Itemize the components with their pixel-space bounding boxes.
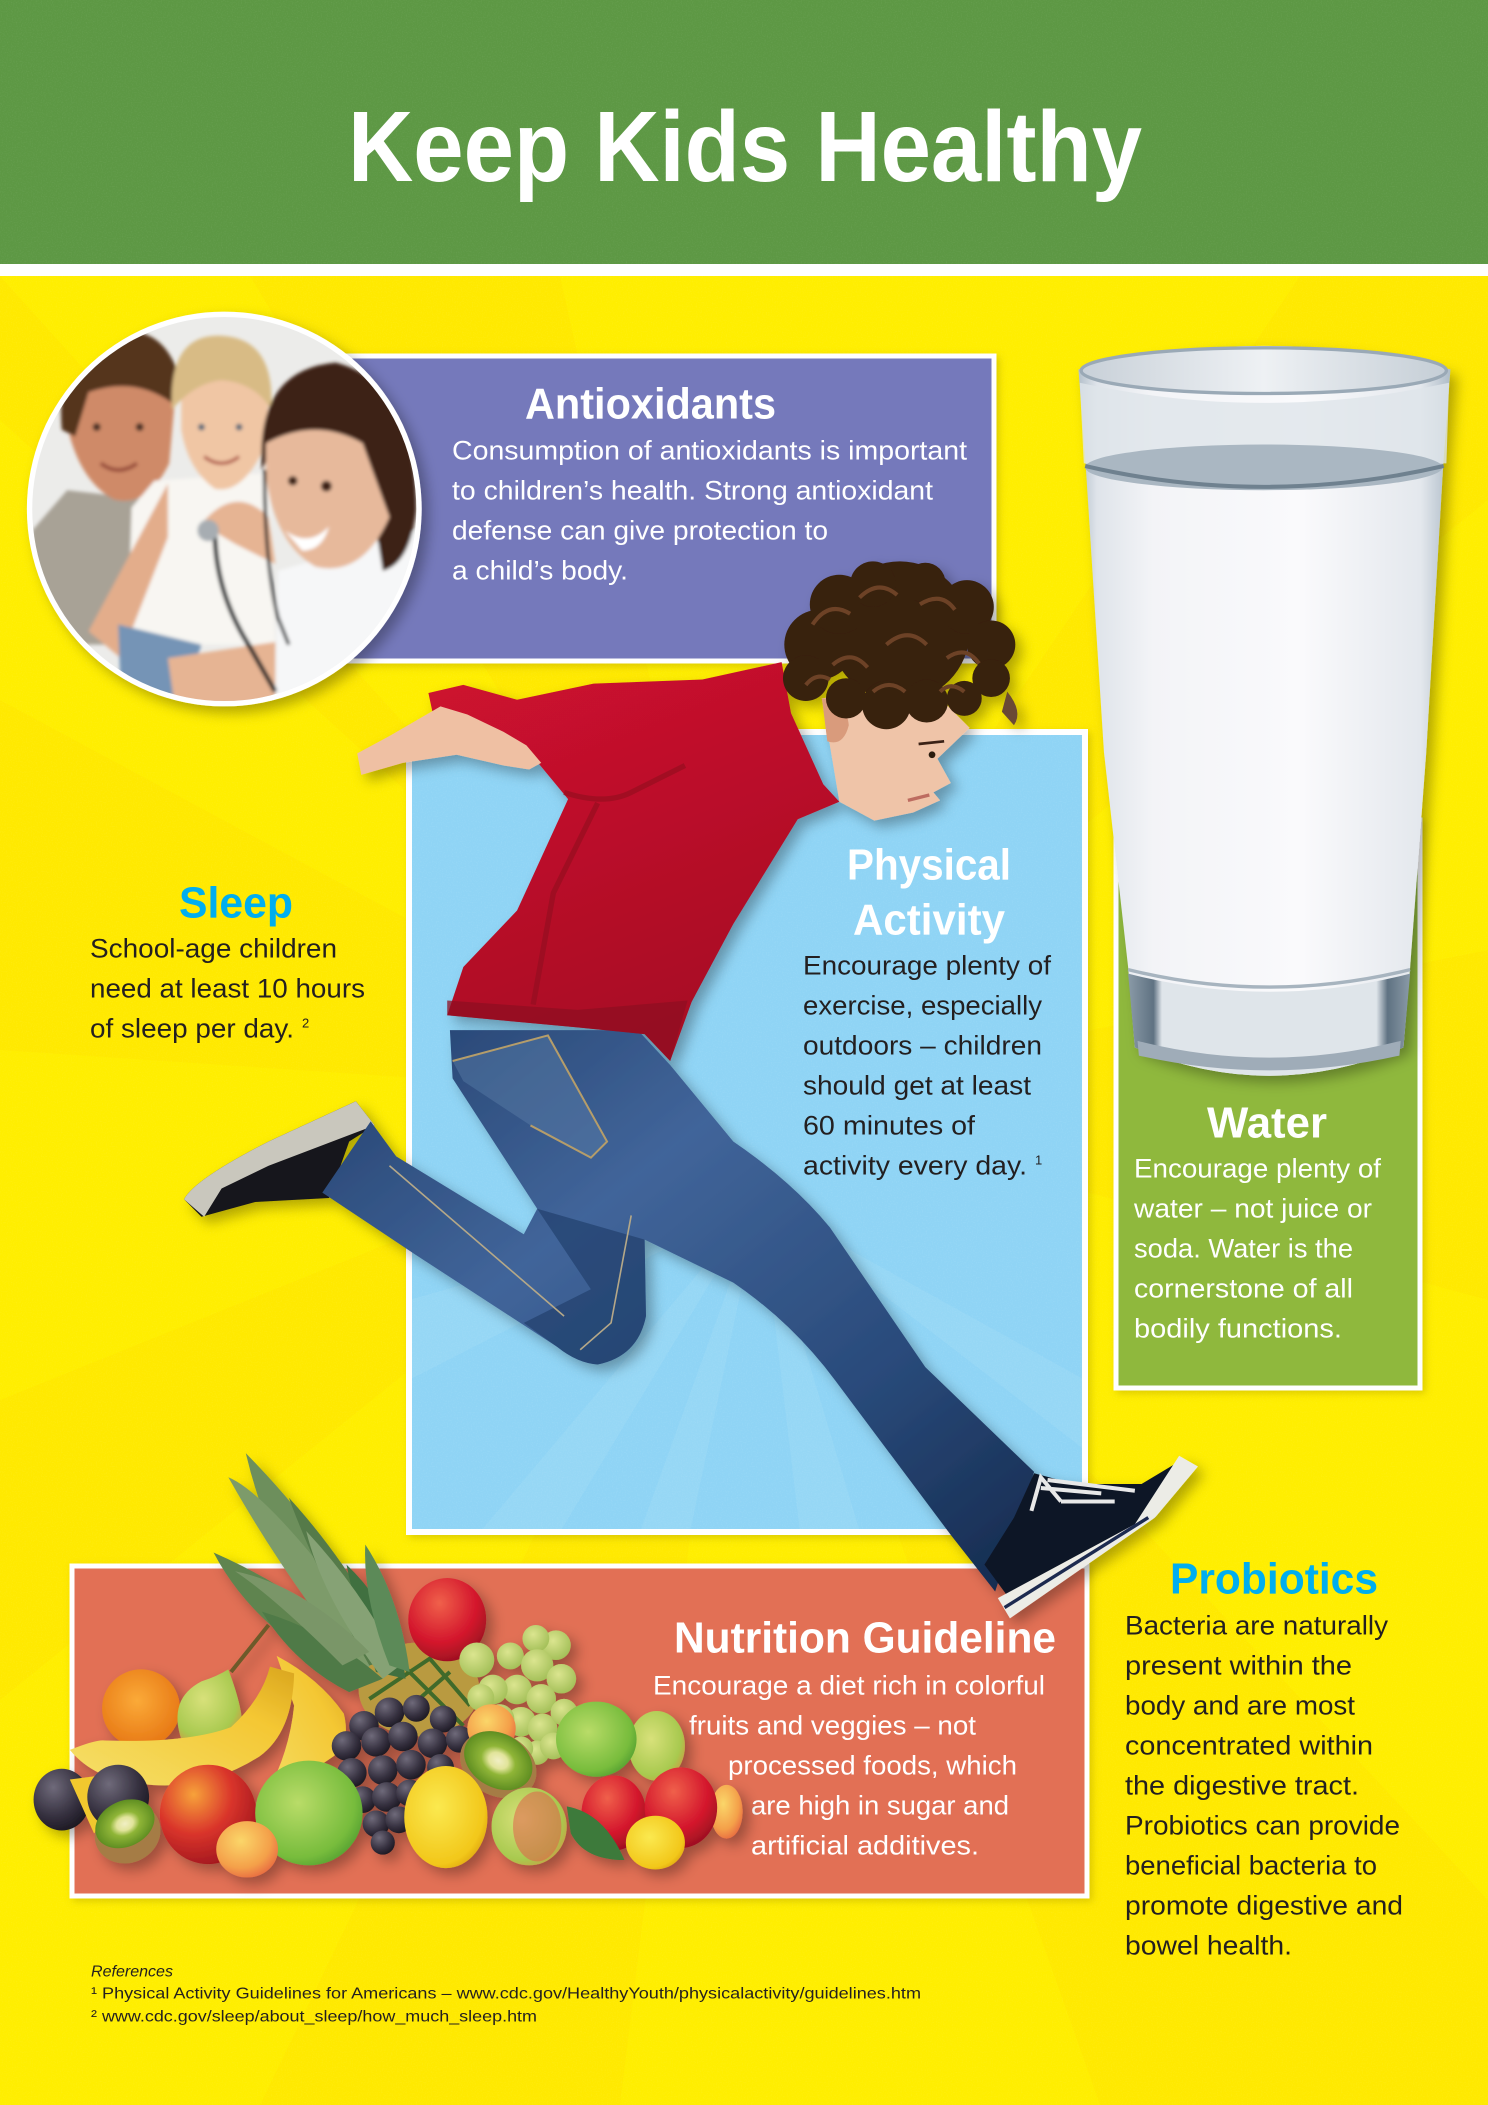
illustration: jumping boy [184, 561, 1198, 1618]
text: sleep: School-age children [90, 934, 337, 964]
leaf [567, 1806, 624, 1860]
sweater [428, 662, 839, 1061]
heading: nutrition guideline: Nutrition Guideline [674, 1614, 1056, 1662]
pear [177, 1669, 242, 1743]
title: Keep Kids Healthy [348, 91, 1142, 203]
hair curls [806, 588, 979, 692]
references: References [91, 1964, 173, 1980]
hand [357, 706, 541, 775]
text: sleep: need at least 10 hours [90, 974, 365, 1004]
curly hair [783, 561, 1017, 729]
panel: nutrition guideline [72, 1566, 1087, 1896]
heading: physical activity: Physical [847, 840, 1011, 890]
jeans [322, 1030, 1034, 1591]
peaches [216, 1816, 685, 1878]
icon: glass of water [1078, 346, 1450, 1076]
text: antioxidants: Consumption of antioxidants is important [452, 436, 968, 466]
text: probiotics [1125, 1610, 1403, 1960]
face [822, 685, 970, 821]
shoe: back [184, 1101, 375, 1217]
heading: sleep: Sleep [179, 878, 293, 928]
text: sleep [90, 934, 365, 1044]
text: antioxidants: defense can give protection to [452, 516, 828, 546]
text block: probiotics [1125, 1554, 1403, 1960]
text: physical activity: should get at least [803, 1070, 1032, 1100]
text: probiotics: bowel health. [1125, 1930, 1292, 1960]
heading: antioxidants: Antioxidants [525, 380, 776, 428]
text: water: soda. Water is the [1134, 1234, 1353, 1264]
text: nutrition guideline: are high in sugar and [751, 1790, 1009, 1820]
dark grapes [332, 1695, 473, 1855]
text: nutrition guideline [653, 1670, 1045, 1860]
striped apple [492, 1788, 567, 1865]
text: physical activity: activity every day. [803, 1150, 1027, 1180]
text: antioxidants [452, 436, 968, 586]
red nectarines [582, 1767, 743, 1851]
heading: water: Water [1207, 1098, 1327, 1148]
text: probiotics: Probiotics can provide [1125, 1810, 1400, 1840]
lemon [404, 1766, 488, 1868]
orange [102, 1669, 180, 1747]
text: physical activity: Encourage plenty of [803, 950, 1052, 980]
text: probiotics: promote digestive and [1125, 1890, 1403, 1920]
text: probiotics: body and are most [1125, 1690, 1356, 1720]
text: physical activity: exercise, especially [803, 990, 1043, 1020]
green apple right [556, 1702, 637, 1777]
references: ¹ Physical Activity Guidelines for Americans – www.cdc.gov/HealthyYouth/physicalactivity/guidelines.htm [91, 1986, 921, 2002]
shoe: front [984, 1456, 1198, 1618]
text: nutrition guideline: processed foods, which [728, 1750, 1017, 1780]
green apple [255, 1761, 363, 1865]
text: sleep: 2 [302, 1016, 309, 1030]
panel: physical activity [409, 732, 1085, 1532]
text: probiotics: the digestive tract. [1125, 1770, 1359, 1800]
illustration: fruit pile [34, 1453, 743, 1878]
plums and kiwi left [34, 1765, 171, 1874]
text: sleep: of sleep per day. [90, 1014, 294, 1044]
text: water: Encourage plenty of [1134, 1154, 1382, 1184]
text: physical activity: outdoors – children [803, 1030, 1042, 1060]
panel: antioxidants [340, 356, 994, 661]
kiwi slice [448, 1718, 549, 1812]
panel: water [1116, 820, 1420, 1388]
heading: physical activity: Activity [853, 896, 1005, 944]
references: ² www.cdc.gov/sleep/about_sleep/how_much_sleep.htm [91, 2008, 537, 2026]
text block: sleep [90, 878, 365, 1044]
text: nutrition guideline: fruits and veggies – not [689, 1710, 977, 1740]
text: probiotics: present within the [1125, 1650, 1352, 1680]
yellow apple [629, 1711, 685, 1781]
text: probiotics: beneficial bacteria to [1125, 1850, 1377, 1880]
green grapes [459, 1625, 577, 1765]
text: nutrition guideline: Encourage a diet rich in colorful [653, 1670, 1045, 1700]
text: physical activity: 1 [1035, 1152, 1042, 1168]
text: probiotics: Bacteria are naturally [1125, 1610, 1389, 1640]
text: nutrition guideline: artificial additives. [751, 1830, 979, 1860]
peach [467, 1704, 516, 1753]
pineapple [214, 1453, 479, 1736]
text: antioxidants: to children’s health. Strong antioxidant [452, 476, 934, 506]
header band [0, 0, 1488, 276]
references [91, 1964, 921, 2026]
photo: family with doctor [27, 309, 430, 712]
text: physical activity: 60 minutes of [803, 1110, 976, 1140]
red apple [160, 1765, 257, 1864]
text: antioxidants: a child’s body. [452, 556, 628, 586]
text: physical activity [803, 950, 1052, 1180]
facial features [908, 741, 944, 800]
text: probiotics: concentrated within [1125, 1730, 1373, 1760]
bananas [70, 1656, 346, 1806]
text: water [1133, 1154, 1382, 1344]
plum [408, 1578, 486, 1661]
ear [822, 698, 849, 742]
heading: physical activity [847, 840, 1011, 944]
text: water: water – not juice or [1133, 1194, 1372, 1224]
text: water: bodily functions. [1134, 1314, 1342, 1344]
heading: probiotics: Probiotics [1170, 1554, 1378, 1604]
text: water: cornerstone of all [1134, 1274, 1353, 1304]
